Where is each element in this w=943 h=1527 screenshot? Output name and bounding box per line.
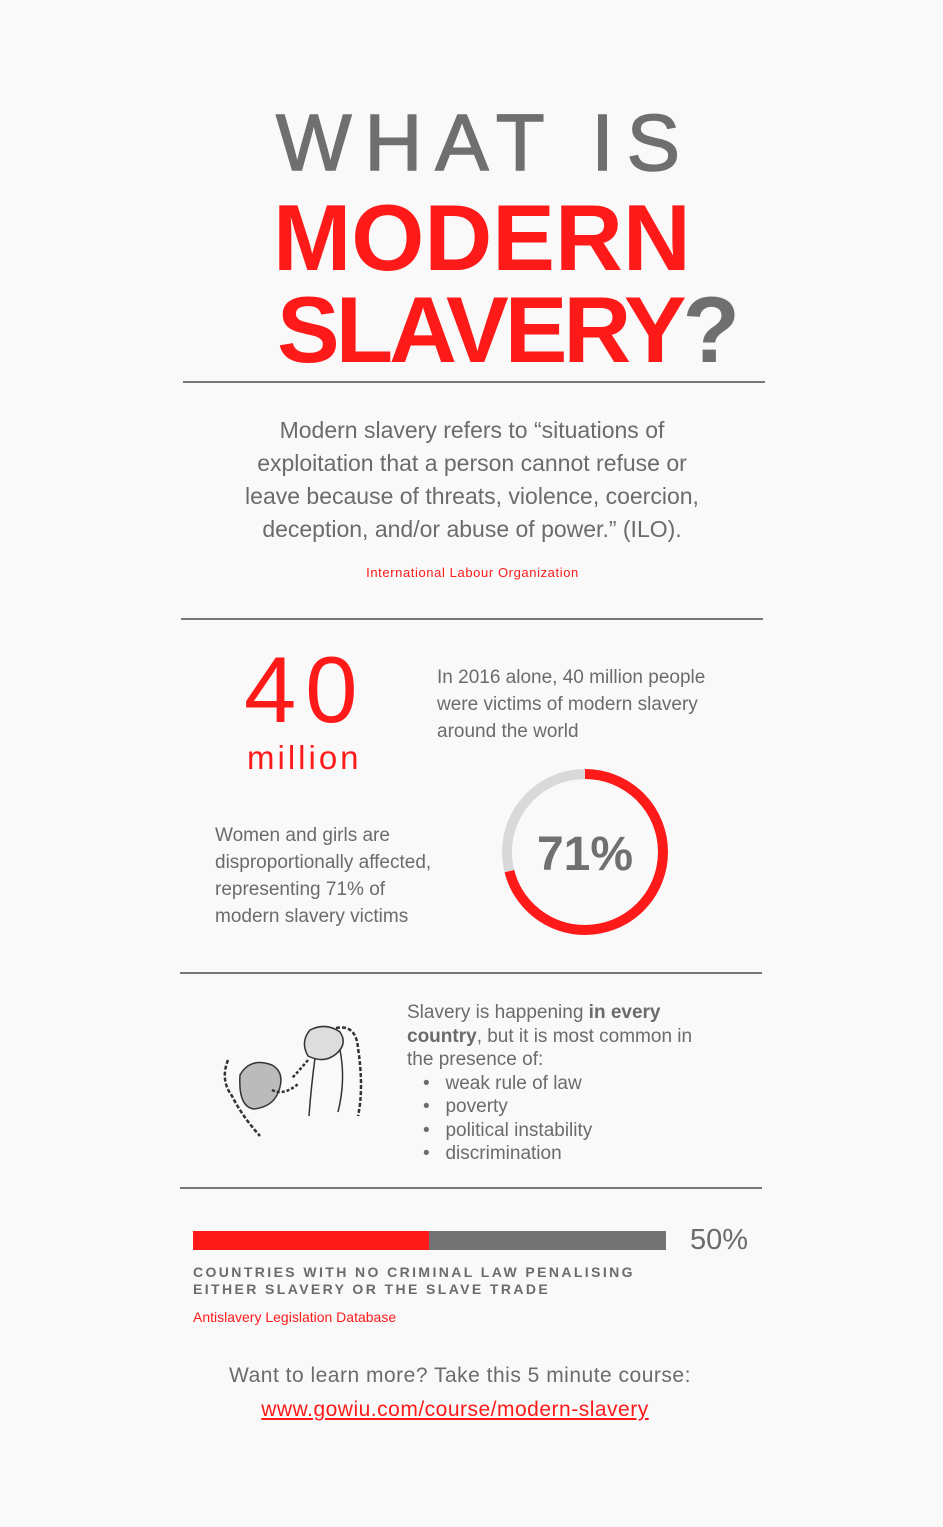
stat: 40 million: million xyxy=(247,739,362,776)
definition text xyxy=(245,417,699,542)
bullet list: • discrimination xyxy=(423,1143,562,1164)
women text: modern slavery victims xyxy=(215,906,408,927)
women text xyxy=(215,825,431,927)
title xyxy=(273,98,736,382)
bullet list xyxy=(423,1072,592,1164)
bullet list: • political instability xyxy=(423,1120,592,1140)
stat text: In 2016 alone, 40 million people xyxy=(437,667,705,688)
text: where slavery happens xyxy=(407,1002,692,1164)
bullet list: • weak rule of law xyxy=(423,1072,582,1094)
definition text: exploitation that a person cannot refuse or xyxy=(257,450,687,476)
bar caption: EITHER SLAVERY OR THE SLAVE TRADE xyxy=(193,1281,550,1297)
text: where slavery happens: the presence of: xyxy=(407,1049,543,1070)
stat: 40 million: 40 xyxy=(244,637,367,742)
source: database: Antislavery Legislation Database xyxy=(193,1309,396,1325)
definition text: deception, and/or abuse of power.” (ILO). xyxy=(262,516,682,542)
stat text: around the world xyxy=(437,721,579,742)
bar chart 50% xyxy=(193,1231,666,1250)
stat text xyxy=(437,667,705,742)
bullet list: • poverty xyxy=(423,1096,508,1117)
text: where slavery happens: Slavery is happening in every xyxy=(407,1002,660,1023)
women text: Women and girls are xyxy=(215,825,390,846)
text: where slavery happens: country, but it is most common in xyxy=(407,1026,692,1046)
women text: disproportionally affected, xyxy=(215,852,431,873)
bar caption xyxy=(193,1264,635,1297)
bar caption: COUNTRIES WITH NO CRIMINAL LAW PENALISING xyxy=(193,1264,635,1280)
women text: representing 71% of xyxy=(215,879,385,900)
definition text: leave because of threats, violence, coercion, xyxy=(245,483,699,509)
donut chart 71%: 71% xyxy=(537,828,633,881)
title line 3: SLAVERY? xyxy=(277,277,736,382)
stat text: were victims of modern slavery xyxy=(437,694,698,715)
title line 2: MODERN xyxy=(273,185,691,290)
definition text: Modern slavery refers to “situations of xyxy=(280,417,664,443)
link: www.gowiu.com/course/modern-slavery xyxy=(261,1398,649,1421)
call to action: Want to learn more? Take this 5 minute course: xyxy=(229,1364,691,1387)
donut chart 71% xyxy=(502,769,668,935)
50% label: 50% xyxy=(690,1224,748,1256)
title line 1: WHAT IS xyxy=(276,98,693,187)
icon: breaking chains hands xyxy=(224,1026,362,1137)
source: ILO: International Labour Organization xyxy=(366,565,579,580)
